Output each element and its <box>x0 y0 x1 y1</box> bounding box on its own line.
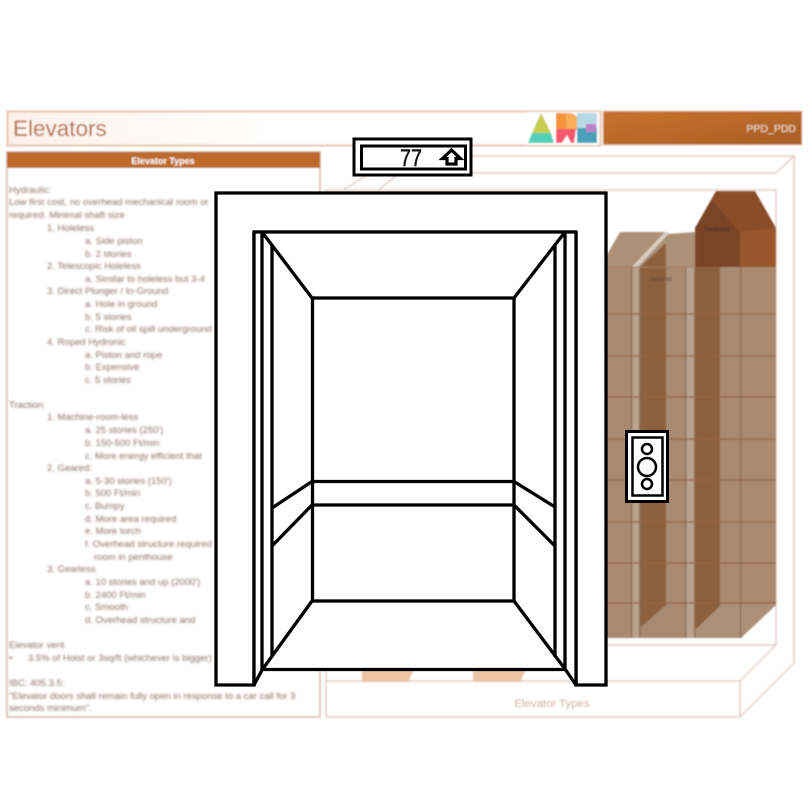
title band <box>8 112 600 146</box>
traction notes: a. 5-30 stories (150') <box>85 476 172 487</box>
traction notes: c. Bumpy <box>85 501 125 512</box>
hydraulic notes: a. Side piston <box>85 236 143 247</box>
traction notes: Traction: <box>9 400 46 411</box>
panel heading <box>7 152 320 168</box>
vent and code notes: 3.5% of Hoist or 3sq/ft (whichever is bigger) <box>28 653 212 664</box>
floor indicator display <box>354 139 471 175</box>
base pads <box>362 670 526 682</box>
hydraulic notes: b. 5 stories <box>85 312 132 323</box>
blurred slide backdrop <box>7 111 802 717</box>
hydraulic notes: required. Minimal shaft size <box>9 210 125 221</box>
hydraulic notes: b. 2 stories <box>85 249 132 260</box>
traction notes <box>9 400 212 626</box>
title: Elevators <box>13 116 107 141</box>
vent and code notes: • <box>9 653 12 664</box>
hydraulic notes: Low first cost, no overhead mechanical room or <box>9 197 209 208</box>
back wall <box>312 298 514 601</box>
hydraulic notes: c. Risk of oil spill underground <box>85 324 212 335</box>
traction notes: a. 10 stories and up (2000') <box>85 577 200 588</box>
handrail <box>272 482 555 546</box>
diagram caption: Elevator Types <box>514 698 590 710</box>
vent and code notes: seconds minimum". <box>9 703 92 714</box>
hydraulic notes: a. Similar to holeless but 3-4 <box>85 274 205 285</box>
left door jambs <box>254 232 272 685</box>
icon: up arrow <box>442 150 460 164</box>
traction notes: e. More torch <box>85 526 141 537</box>
panel: shaft diagram <box>326 156 794 717</box>
cab interior <box>254 232 576 685</box>
vent and code notes: Elevator vent <box>9 640 65 651</box>
machine room cap: Gearless <box>704 226 731 233</box>
hydraulic notes: a. Piston and rope <box>85 350 162 361</box>
panel heading: Elevator Types <box>131 156 195 166</box>
machine room cap <box>695 191 776 267</box>
panel: elevator types text <box>7 152 320 717</box>
elevator shaft columns <box>600 232 776 638</box>
logo <box>526 112 599 145</box>
ceiling and floor edges <box>254 232 576 685</box>
traction notes: b. 150-500 Ft/min <box>85 438 159 449</box>
traction notes: f. Overhead structure required <box>85 539 212 550</box>
traction notes: b. 500 Ft/min <box>85 488 140 499</box>
right door jambs <box>555 232 576 685</box>
traction notes: b. 2400 Ft/min <box>85 590 146 601</box>
hydraulic notes: a. Hole in ground <box>85 299 157 310</box>
code banner <box>603 111 802 145</box>
hydraulic notes: 1. Holeless <box>47 223 94 234</box>
floor number: 77 <box>400 145 422 172</box>
traction notes: 2. Geared: <box>47 463 92 474</box>
traction notes: d. More area required <box>85 514 176 525</box>
traction notes: room in penthouse <box>94 552 173 563</box>
code banner: PPD_PDD <box>746 123 796 135</box>
vent and code notes: IBC: 405.3.5: <box>9 678 64 689</box>
hydraulic notes: c. 5 stories <box>85 375 131 386</box>
vent and code notes: "Elevator doors shall remain fully open in response to a car call for 3 <box>9 691 295 702</box>
hydraulic notes: b. Expensive <box>85 362 139 373</box>
hydraulic notes: Hydraulic: <box>9 185 51 196</box>
traction notes: c. Smooth <box>85 602 128 613</box>
icon: buttons <box>638 444 656 489</box>
elevator door frame and cab <box>216 193 606 685</box>
column label: Geared <box>650 276 672 283</box>
traction notes: c. More energy efficient that <box>85 451 202 462</box>
vent and code notes <box>9 640 295 714</box>
hydraulic notes <box>9 185 212 386</box>
hydraulic notes: 2. Telescopic Holeless <box>47 261 141 272</box>
hydraulic notes: 3. Direct Plunger / In-Ground <box>47 286 168 297</box>
diagram box <box>326 156 794 717</box>
door frame <box>216 193 606 685</box>
traction notes: d. Overhead structure and <box>85 615 195 626</box>
traction notes: 1. Machine-room-less <box>47 412 139 423</box>
hydraulic notes: 4. Roped Hydronic <box>47 337 126 348</box>
call button panel <box>626 432 668 502</box>
traction notes: 3. Gearless <box>47 564 96 575</box>
traction notes: a. 25 stories (250') <box>85 425 163 436</box>
